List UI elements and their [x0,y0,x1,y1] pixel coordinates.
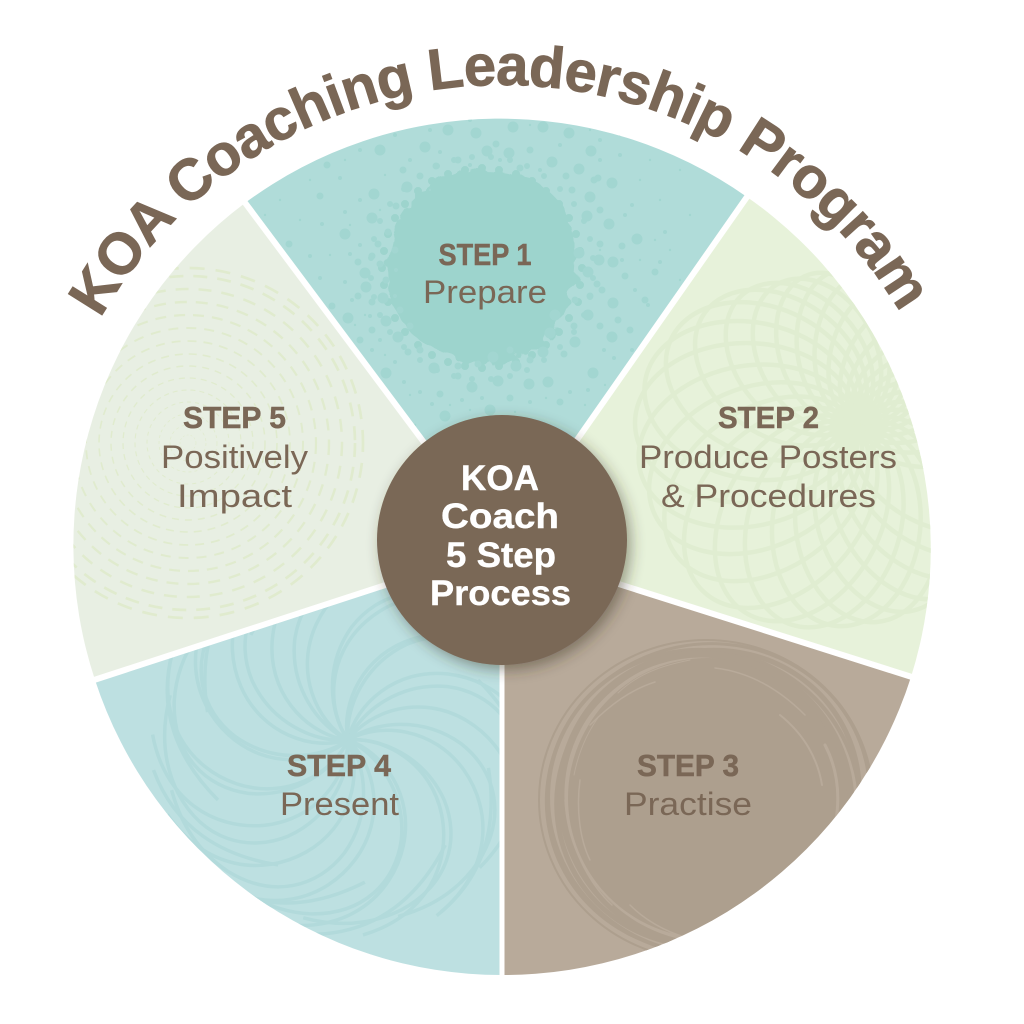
centre hub: Process [430,574,571,613]
step 4 label: STEP 4 [287,748,392,783]
step 5 label: Impact [177,478,292,514]
panel: step 4 [96,588,500,975]
shell rib texture [633,270,931,630]
panel: step 1 [248,118,744,440]
centre hub: 5 Step [446,536,556,575]
dashed concentric texture [73,266,364,620]
step 2 label: & Procedures [661,478,876,514]
panel: step 2 [580,199,931,674]
step 2 label: STEP 2 [718,400,819,435]
step 2 label [639,400,897,514]
panel: step 5 [73,204,422,677]
step 2 label: Produce Posters [639,439,897,475]
step 5 label: STEP 5 [183,400,286,435]
centre hub [377,415,627,665]
step 1 label: Prepare [423,274,547,310]
centre hub: KOA [461,459,539,498]
step 1 label [423,237,547,310]
title: KOA Coaching Leadership Program [68,45,922,316]
centre hub: Coach [441,497,559,536]
step 5 label: Positively [161,439,308,475]
scribble ring texture [538,639,870,950]
step 3 label [624,748,752,822]
step 4 label: Present [280,786,399,822]
step 1 label: STEP 1 [438,237,532,272]
step 4 label [280,748,399,822]
step 5 label [161,400,308,514]
bubble texture [258,110,690,425]
panel: step 3 [504,587,910,975]
swirl texture [151,596,500,936]
step 3 label: STEP 3 [637,748,739,783]
step 3 label: Practise [624,786,752,822]
